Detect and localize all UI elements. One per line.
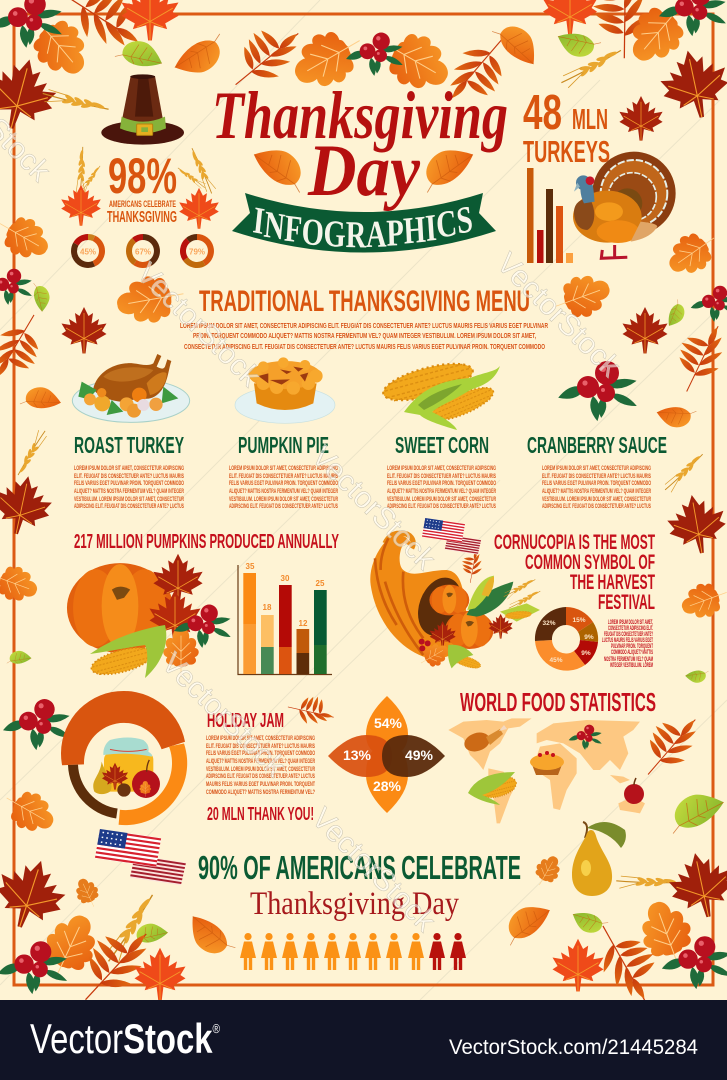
icon: maple leaf <box>122 0 178 40</box>
icon: oak <box>632 894 701 974</box>
panel: border foliage bottom right <box>496 847 727 1002</box>
icon: maple <box>134 948 186 1000</box>
watermark: VectorStock <box>305 802 442 939</box>
icon: branch <box>288 687 336 736</box>
panel: border foliage bottom left <box>0 851 239 1000</box>
text block: pumpkin pie: FELIS VARIUS EGET PULVINAR PROIN. TORQUENT COMMODO <box>229 480 338 487</box>
panel: 98 percent stat <box>60 147 219 229</box>
watermark: VectorStock <box>130 257 267 394</box>
logo: VectorStock <box>30 1015 237 1062</box>
icon: pilgrim hat <box>101 74 184 145</box>
icon: dark maple <box>664 847 727 923</box>
text: FEUGIAT DIS CONSECTETUER ANTE? <box>604 632 653 638</box>
text block: pumpkin pie: LOREM IPSUM DOLOR SIT AMET, CONSECTETUR ADIPISCING <box>229 465 338 472</box>
icon: drumstick <box>462 725 507 755</box>
icon: berries <box>660 936 727 990</box>
icon: orange leaf <box>657 407 696 427</box>
icon: berries <box>1 699 71 751</box>
bar chart: pumpkins: 30 <box>281 574 290 583</box>
intro text: PROIN. TORQUENT COMMODO ALIQUET? MATTIS NOSTRA FERMENTUM VEL? QUAM INTEGER VESTIBULUM. LOREM IPSUM DOLOR SIT AMET, <box>193 331 536 340</box>
panel: border foliage top right <box>543 0 727 141</box>
icon: small maple leaf <box>619 96 663 141</box>
icon: dark maple leaf <box>0 470 56 540</box>
icon: wheat <box>659 454 710 494</box>
chart: small donut 79 percent: 79% <box>189 248 205 256</box>
chart: small donut 67 percent <box>129 237 157 265</box>
icon: branch <box>441 37 513 104</box>
text block: sweet corn: ELIT. FEUGIAT DIS CONSECTETUER ANTE? LUCTUS MAURIS <box>387 473 496 480</box>
icon: pumpkin <box>67 563 173 653</box>
icon: orange leaf <box>170 29 233 85</box>
text block: sweet corn: ALIQUET? MATTIS NOSTRA FERMENTUM VEL? QUAM INTEGER <box>387 488 496 495</box>
icon: dark maple leaf <box>664 490 727 558</box>
icon: berries <box>657 0 727 37</box>
heading: PUMPKIN PIE <box>238 432 329 458</box>
bar chart: pumpkins: 35 <box>246 562 255 571</box>
icon: oak <box>33 906 106 988</box>
icon: dark maple leaf <box>655 44 727 124</box>
icon: orange leaf <box>181 911 239 965</box>
icon: oak leaf <box>677 576 727 625</box>
panel: title foliage <box>284 15 546 104</box>
chart: donut: 32% <box>542 620 556 627</box>
text block: sweet corn: LOREM IPSUM DOLOR SIT AMET, CONSECTETUR ADIPISCING <box>387 465 496 472</box>
text block: pumpkin pie: ELIT. FEUGIAT DIS CONSECTETUER ANTE? LUCTUS MAURIS <box>229 473 338 480</box>
text: INTEGER VESTIBULUM. LOREM <box>610 663 653 669</box>
chart: petal percentages: 28% <box>373 778 402 794</box>
text: LOREM IPSUM DOLOR SIT AMET, <box>608 620 653 626</box>
text block: sweet corn: FELIS VARIUS EGET PULVINAR PROIN. TORQUENT COMMODO <box>387 480 496 487</box>
text block: pumpkin pie: ADIPISCING ELIT. FEUGIAT DIS CONSECTETUER ANTE? LUCTUS <box>229 503 338 510</box>
icon: oak leaf <box>163 628 199 676</box>
icon: oak leaf <box>618 0 699 74</box>
icon: corn <box>468 772 519 805</box>
footer bar <box>0 1000 727 1080</box>
icon: green leaf <box>555 31 602 60</box>
chart: ring <box>61 691 187 825</box>
chart: petal percentages: 54% <box>374 715 403 731</box>
icon: oak leaf <box>660 222 725 284</box>
intro text: CONSECTETUR ADIPISCING ELIT. FEUGIAT DIS CONSECTETUER ANTE? LUCTUS MAURIS FELIS VARIUS EGET PULVINAR PROIN. TORQUENT COMMODO <box>184 342 545 351</box>
icon: berries <box>690 286 727 322</box>
icon: wheat left <box>60 147 106 198</box>
text block: sweet corn: ADIPISCING ELIT. FEUGIAT DIS CONSECTETUER ANTE? LUCTUS <box>387 503 496 510</box>
icon: sweet corn <box>380 356 500 430</box>
text block: VESTIBULUM. LOREM IPSUM DOLOR SIT AMET, CONSECTETUR <box>206 766 315 773</box>
panel: world food statistics <box>448 687 656 823</box>
icon: green leaf <box>666 298 688 329</box>
icon: oak leaf <box>370 20 459 102</box>
icon: wheat right <box>188 148 219 194</box>
icon: green leaf <box>685 669 710 685</box>
icon: branch <box>77 928 155 1000</box>
chart: donut <box>535 607 598 671</box>
icon: green leaf <box>114 37 165 70</box>
text block: cranberry sauce <box>542 465 651 510</box>
icon: dark maple leaf <box>0 51 63 137</box>
watermark <box>0 112 627 939</box>
panel: holiday jam <box>61 687 336 825</box>
icon: pumpkin pie <box>235 357 335 423</box>
icon: jam jar <box>93 737 160 798</box>
icon: roast turkey <box>72 354 190 422</box>
panel: cornucopia: PULVINAR PROIN. TORQUENT <box>611 644 653 650</box>
icon: corn <box>89 625 166 680</box>
text block: ADIPISCING ELIT. FEUGIAT DIS CONSECTETUER ANTE? LUCTUS <box>206 773 315 780</box>
heading: THE HARVEST <box>570 571 655 594</box>
icon: branch <box>236 28 299 85</box>
icon: wheat <box>4 428 57 475</box>
label: TURKEYS <box>523 134 610 169</box>
bar chart: pumpkins: 12 <box>299 619 308 628</box>
icon: branch <box>64 0 145 61</box>
icon: berries <box>0 269 33 305</box>
text block: pumpkin pie: VESTIBULUM. LOREM IPSUM DOLOR SIT AMET, CONSECTETUR <box>229 496 338 503</box>
bar chart: pumpkins <box>238 562 332 674</box>
heading: ROAST TURKEY <box>74 432 184 458</box>
icon: maple left <box>61 185 101 226</box>
chart: small donut 79 percent <box>183 237 211 265</box>
icon: berries <box>568 725 602 750</box>
icon: oak leaf <box>284 18 373 100</box>
text block: FELIS VARIUS EGET PULVINAR PROIN. TORQUENT COMMODO <box>206 750 315 757</box>
subtitle: Thanksgiving Day <box>250 886 459 922</box>
chart: donut: 9% <box>584 634 594 641</box>
icon: oak leaf <box>113 271 188 328</box>
icon: maple leaf <box>153 554 203 605</box>
icon: oak leaf <box>0 559 42 608</box>
text: CONSECTETUR ADIPISCING ELIT. <box>608 626 653 632</box>
icon: green leaf <box>5 649 32 666</box>
text block: ELIT. FEUGIAT DIS CONSECTETUER ANTE? LUCTUS MAURIS <box>206 743 315 750</box>
label: THANKSGIVING <box>107 209 177 226</box>
icon: orange leaf <box>489 15 546 70</box>
watermark: VectorStock <box>155 647 292 784</box>
icon: maple leaf <box>622 307 668 354</box>
icon: maple <box>552 939 604 992</box>
text block: sweet corn: VESTIBULUM. LOREM IPSUM DOLOR SIT AMET, CONSECTETUR <box>387 496 496 503</box>
icon: orange leaf <box>20 387 61 408</box>
heading: SWEET CORN <box>395 432 489 458</box>
text block <box>602 620 653 669</box>
chart: donut: 15% <box>572 617 586 624</box>
icon: cornucopia <box>370 533 540 673</box>
icon: orange leaf <box>496 895 554 950</box>
icon: green leaf <box>661 783 727 839</box>
icon: orange leaf left of Day <box>249 137 315 197</box>
panel: border foliage left <box>0 207 71 841</box>
icon: wheat right small <box>178 160 207 195</box>
icon: pie <box>530 751 564 775</box>
icon: green leaf <box>31 280 53 313</box>
bar chart <box>527 168 573 263</box>
heading: TRADITIONAL THANKSGIVING MENU <box>199 285 530 318</box>
chart: donut: 45% <box>549 657 563 664</box>
icon: maple leaf <box>62 307 106 354</box>
icon: branch <box>665 322 727 392</box>
icon: maple leaf <box>543 0 597 35</box>
icon: branch <box>639 715 704 774</box>
icon: berries <box>0 941 69 995</box>
text block: roast turkey: ADIPISCING ELIT. FEUGIAT DIS CONSECTETUER ANTE? LUCTUS <box>74 503 184 510</box>
icon: berries <box>345 33 404 76</box>
icon: wheat <box>561 50 621 88</box>
icon: flags <box>422 518 481 555</box>
heading: 90% OF AMERICANS CELEBRATE <box>198 849 521 886</box>
panel: 48 million turkeys <box>523 86 676 263</box>
title: Thanksgiving Day <box>212 77 508 212</box>
text block <box>206 735 315 796</box>
text block: cranberry sauce: ELIT. FEUGIAT DIS CONSECTETUER ANTE? LUCTUS MAURIS <box>542 473 651 480</box>
title: Thanksgiving Day: Day <box>307 130 421 212</box>
heading: HOLIDAY JAM <box>207 710 284 732</box>
icon: branch <box>576 0 669 58</box>
panel: border foliage top left <box>0 0 299 137</box>
callout: 20 MLN THANK YOU! <box>207 804 314 824</box>
watermark: VectorStock <box>305 440 442 577</box>
intro text <box>180 321 548 351</box>
panel: traditional menu <box>62 267 668 510</box>
text block: roast turkey: ELIT. FEUGIAT DIS CONSECTETUER ANTE? LUCTUS MAURIS <box>74 473 184 480</box>
icon: turkey <box>573 152 676 258</box>
icon: wheat <box>91 895 173 967</box>
icon: oak small <box>529 851 566 891</box>
chart: donut: 9% <box>581 650 591 657</box>
panel: pumpkins produced <box>67 531 339 680</box>
panel: cornucopia: COMMODO ALIQUET? MATTIS <box>611 650 653 656</box>
heading: FESTIVAL <box>598 591 655 614</box>
chart: small donut 45 percent <box>74 237 102 265</box>
bar chart: pumpkins: 18 <box>263 603 272 612</box>
watermark: VectorStock <box>490 247 627 384</box>
text block: roast turkey: FELIS VARIUS EGET PULVINAR PROIN. TORQUENT COMMODO <box>74 480 184 487</box>
chart: small donut 67 percent: 67% <box>135 248 151 256</box>
label: MLN <box>572 104 608 136</box>
icon: wheat left small <box>73 166 108 195</box>
text block: COMMODO ALIQUET? MATTIS NOSTRA FERMENTUM VEL? <box>206 789 315 796</box>
chart: small donut 45 percent: 45% <box>80 248 96 256</box>
icon: orange leaf right of Day <box>412 137 478 197</box>
text: LUCTUS MAURIS FELIS VARIUS EGET <box>602 638 653 644</box>
big number: 98% <box>108 148 177 204</box>
url: VectorStock.com/21445284 <box>449 1036 698 1059</box>
icon: pear <box>572 822 626 896</box>
text block: roast turkey <box>74 465 184 510</box>
text block: ALIQUET? MATTIS NOSTRA FERMENTUM VEL? QUAM INTEGER <box>206 758 315 765</box>
ribbon: Infographics: INFOGRAPHICS <box>251 198 475 257</box>
icon: green leaf <box>569 910 609 937</box>
icon: cranberries <box>556 361 639 422</box>
text block: LOREM IPSUM DOLOR SIT AMET, CONSECTETUR ADIPISCING <box>206 735 315 742</box>
icon: branch <box>591 926 662 1002</box>
text block: pumpkin pie: ALIQUET? MATTIS NOSTRA FERMENTUM VEL? QUAM INTEGER <box>229 488 338 495</box>
icon: oak leaf <box>0 207 56 267</box>
logo: ® <box>213 1021 220 1036</box>
text block: pumpkin pie <box>229 465 338 510</box>
icon: berries <box>0 0 63 49</box>
chart: petal percentages: 13% <box>343 747 372 763</box>
icon: oak leaf <box>18 4 99 87</box>
icon: oak leaf <box>0 781 62 841</box>
icon: branch <box>0 315 51 382</box>
panel: border foliage right <box>639 222 727 839</box>
text block: MAURIS FELIS VARIUS EGET PULVINAR PROIN. TORQUENT <box>206 781 315 788</box>
heading: 217 MILLION PUMPKINS PRODUCED ANNUALLY <box>74 531 339 553</box>
icon: maple right <box>179 188 219 229</box>
icon: dark maple <box>0 851 73 937</box>
map <box>448 718 645 823</box>
icon: apple <box>624 778 644 804</box>
text block: roast turkey: LOREM IPSUM DOLOR SIT AMET, CONSECTETUR ADIPISCING <box>74 465 184 472</box>
pictogram: people <box>240 933 466 970</box>
icon: small oak <box>71 875 104 911</box>
icon: berries <box>173 605 232 648</box>
panel: cornucopia: NOSTRA FERMENTUM VEL? QUAM <box>604 657 653 663</box>
icon: green leaf <box>129 919 169 947</box>
text block: sweet corn <box>387 465 496 510</box>
panel: 90 percent celebrate <box>198 849 521 970</box>
chart: petal percentages: 49% <box>405 747 434 763</box>
icon: wheat <box>614 855 680 913</box>
bar chart: pumpkins: 25 <box>316 579 325 588</box>
icon: oak leaf <box>548 267 616 326</box>
text block: roast turkey: VESTIBULUM. LOREM IPSUM DOLOR SIT AMET, CONSECTETUR <box>74 496 184 503</box>
big number: 48 <box>523 86 562 140</box>
panel: cornucopia <box>370 518 655 673</box>
chart: petal percentages <box>328 696 445 813</box>
icon: wheat <box>39 69 109 137</box>
icon: maple leaf <box>150 590 200 642</box>
heading <box>494 531 655 614</box>
text block: roast turkey: ALIQUET? MATTIS NOSTRA FERMENTUM VEL? QUAM INTEGER <box>74 488 184 495</box>
icon: flags <box>95 829 186 885</box>
title: Thanksgiving Day: Thanksgiving <box>212 77 508 153</box>
label: AMERICANS CELEBRATE <box>109 199 176 210</box>
